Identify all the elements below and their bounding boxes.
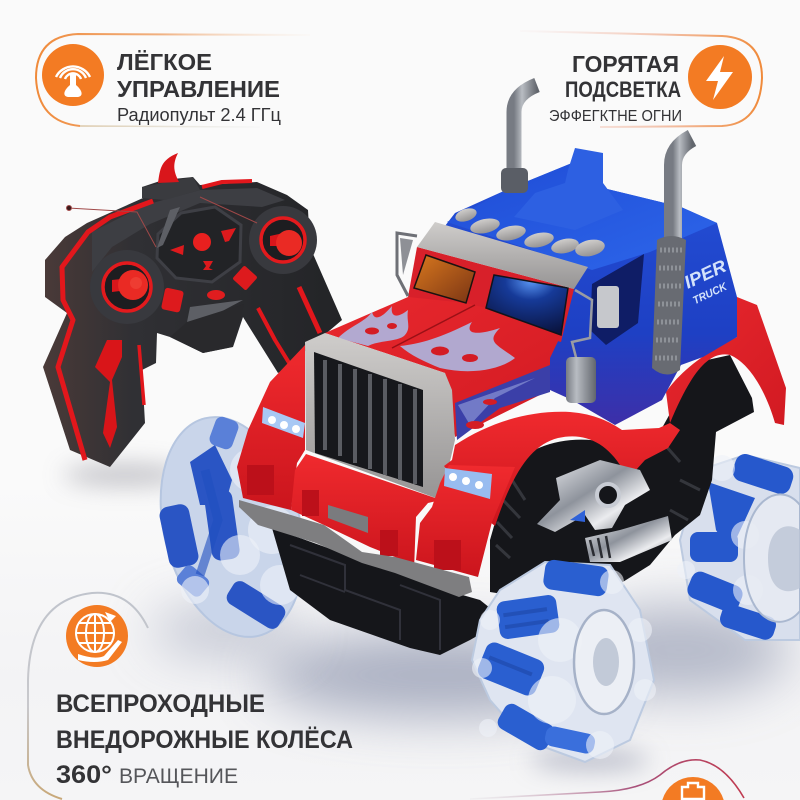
hood flames (338, 306, 515, 371)
callout outline (28, 593, 148, 799)
wheel: front right (472, 559, 656, 762)
subtitle bold: 360° (56, 761, 112, 789)
mirror and fuel tank (566, 286, 619, 403)
truck (237, 85, 786, 655)
controller grip decal (95, 340, 122, 448)
wheel: rear right (677, 451, 800, 642)
heading: ВСЕПРОХОДНЫЕ (56, 690, 265, 718)
heading line 2: ПОДСВЕТКА (565, 77, 681, 102)
controller body (43, 177, 342, 467)
subtitle: Радиопульт 2.4 ГГц (117, 105, 281, 125)
callout: lighting (520, 31, 762, 127)
left wheel blue rollers (158, 415, 288, 632)
red buttons (161, 265, 258, 313)
lower centre panel (170, 290, 244, 353)
black tyres and chassis (272, 355, 754, 655)
wheel: rear left (139, 402, 325, 652)
icon: globe on hand (66, 605, 128, 667)
right joystick (249, 206, 317, 274)
rear fender (666, 297, 786, 425)
roof air scoop (514, 148, 623, 230)
tyre tread (496, 445, 700, 558)
controller top shell highlight (92, 188, 285, 272)
left mirror (397, 233, 417, 296)
windshield frame (408, 247, 574, 342)
front right block (416, 465, 515, 577)
headlight: right (444, 468, 492, 499)
front left fender block (237, 345, 305, 510)
front fender arch (444, 412, 680, 526)
callout outline (470, 760, 744, 799)
roof marker lights (454, 206, 606, 259)
floor shadows (63, 465, 790, 770)
icon: battery (662, 777, 724, 800)
heading line 2: УПРАВЛЕНИЕ (117, 76, 280, 102)
right wheel clear lumps (677, 455, 763, 605)
side window (590, 254, 644, 345)
icon: radio signal (42, 44, 104, 106)
grille surround (305, 333, 455, 500)
hood seam (392, 305, 475, 348)
truck logo text: TRUCK (691, 281, 730, 307)
headlight: left (262, 407, 305, 438)
red hood (325, 297, 561, 437)
front wheel clear lumps (472, 570, 656, 759)
callout: easy control (36, 34, 310, 127)
front wheel roller ribs (488, 607, 549, 676)
chrome motor (537, 460, 672, 562)
silver sun visor (417, 222, 588, 289)
exhaust pipe: right (652, 138, 692, 375)
subtitle: ЭФФЕГКТНЕ ОГНИ (549, 108, 682, 125)
front wheel blue rollers (475, 559, 610, 755)
right wheel blue rollers (685, 451, 796, 642)
grille slats (314, 352, 423, 487)
windshield blue (486, 275, 568, 335)
left wheel clear lumps (181, 448, 300, 605)
left joystick (90, 250, 164, 324)
subtitle: ВРАЩЕНИЕ (119, 765, 238, 788)
callout: all-terrain wheels (28, 593, 353, 799)
callout outline (520, 31, 762, 127)
panel recesses (247, 465, 461, 570)
controller (43, 153, 342, 467)
truck logo text: IPER (681, 256, 729, 293)
exhaust pipe: left (501, 85, 537, 193)
heading line 2: ВНЕДОРОЖНЫЕ КОЛЁСА (56, 726, 353, 754)
roof (447, 163, 717, 270)
front center red panel (291, 454, 441, 570)
callout outline (36, 34, 310, 126)
heading: ГОРЯТАЯ (572, 51, 679, 77)
antenna lever (142, 153, 200, 200)
license plate (328, 505, 368, 533)
truck logo text (681, 256, 736, 307)
flame red cutouts (365, 323, 478, 362)
windshield amber (414, 255, 475, 303)
heading: ЛЁГКОЕ (117, 49, 212, 75)
front bumper (239, 500, 472, 597)
center octagon panel (157, 207, 241, 282)
controller red trim (58, 181, 320, 460)
callout: battery (470, 760, 744, 800)
radiator panel lines (290, 545, 440, 650)
blue cab body (445, 163, 737, 425)
icon: lightning bolt (688, 45, 752, 109)
blue side panel with flames (455, 365, 550, 440)
antenna wire (66, 197, 257, 247)
